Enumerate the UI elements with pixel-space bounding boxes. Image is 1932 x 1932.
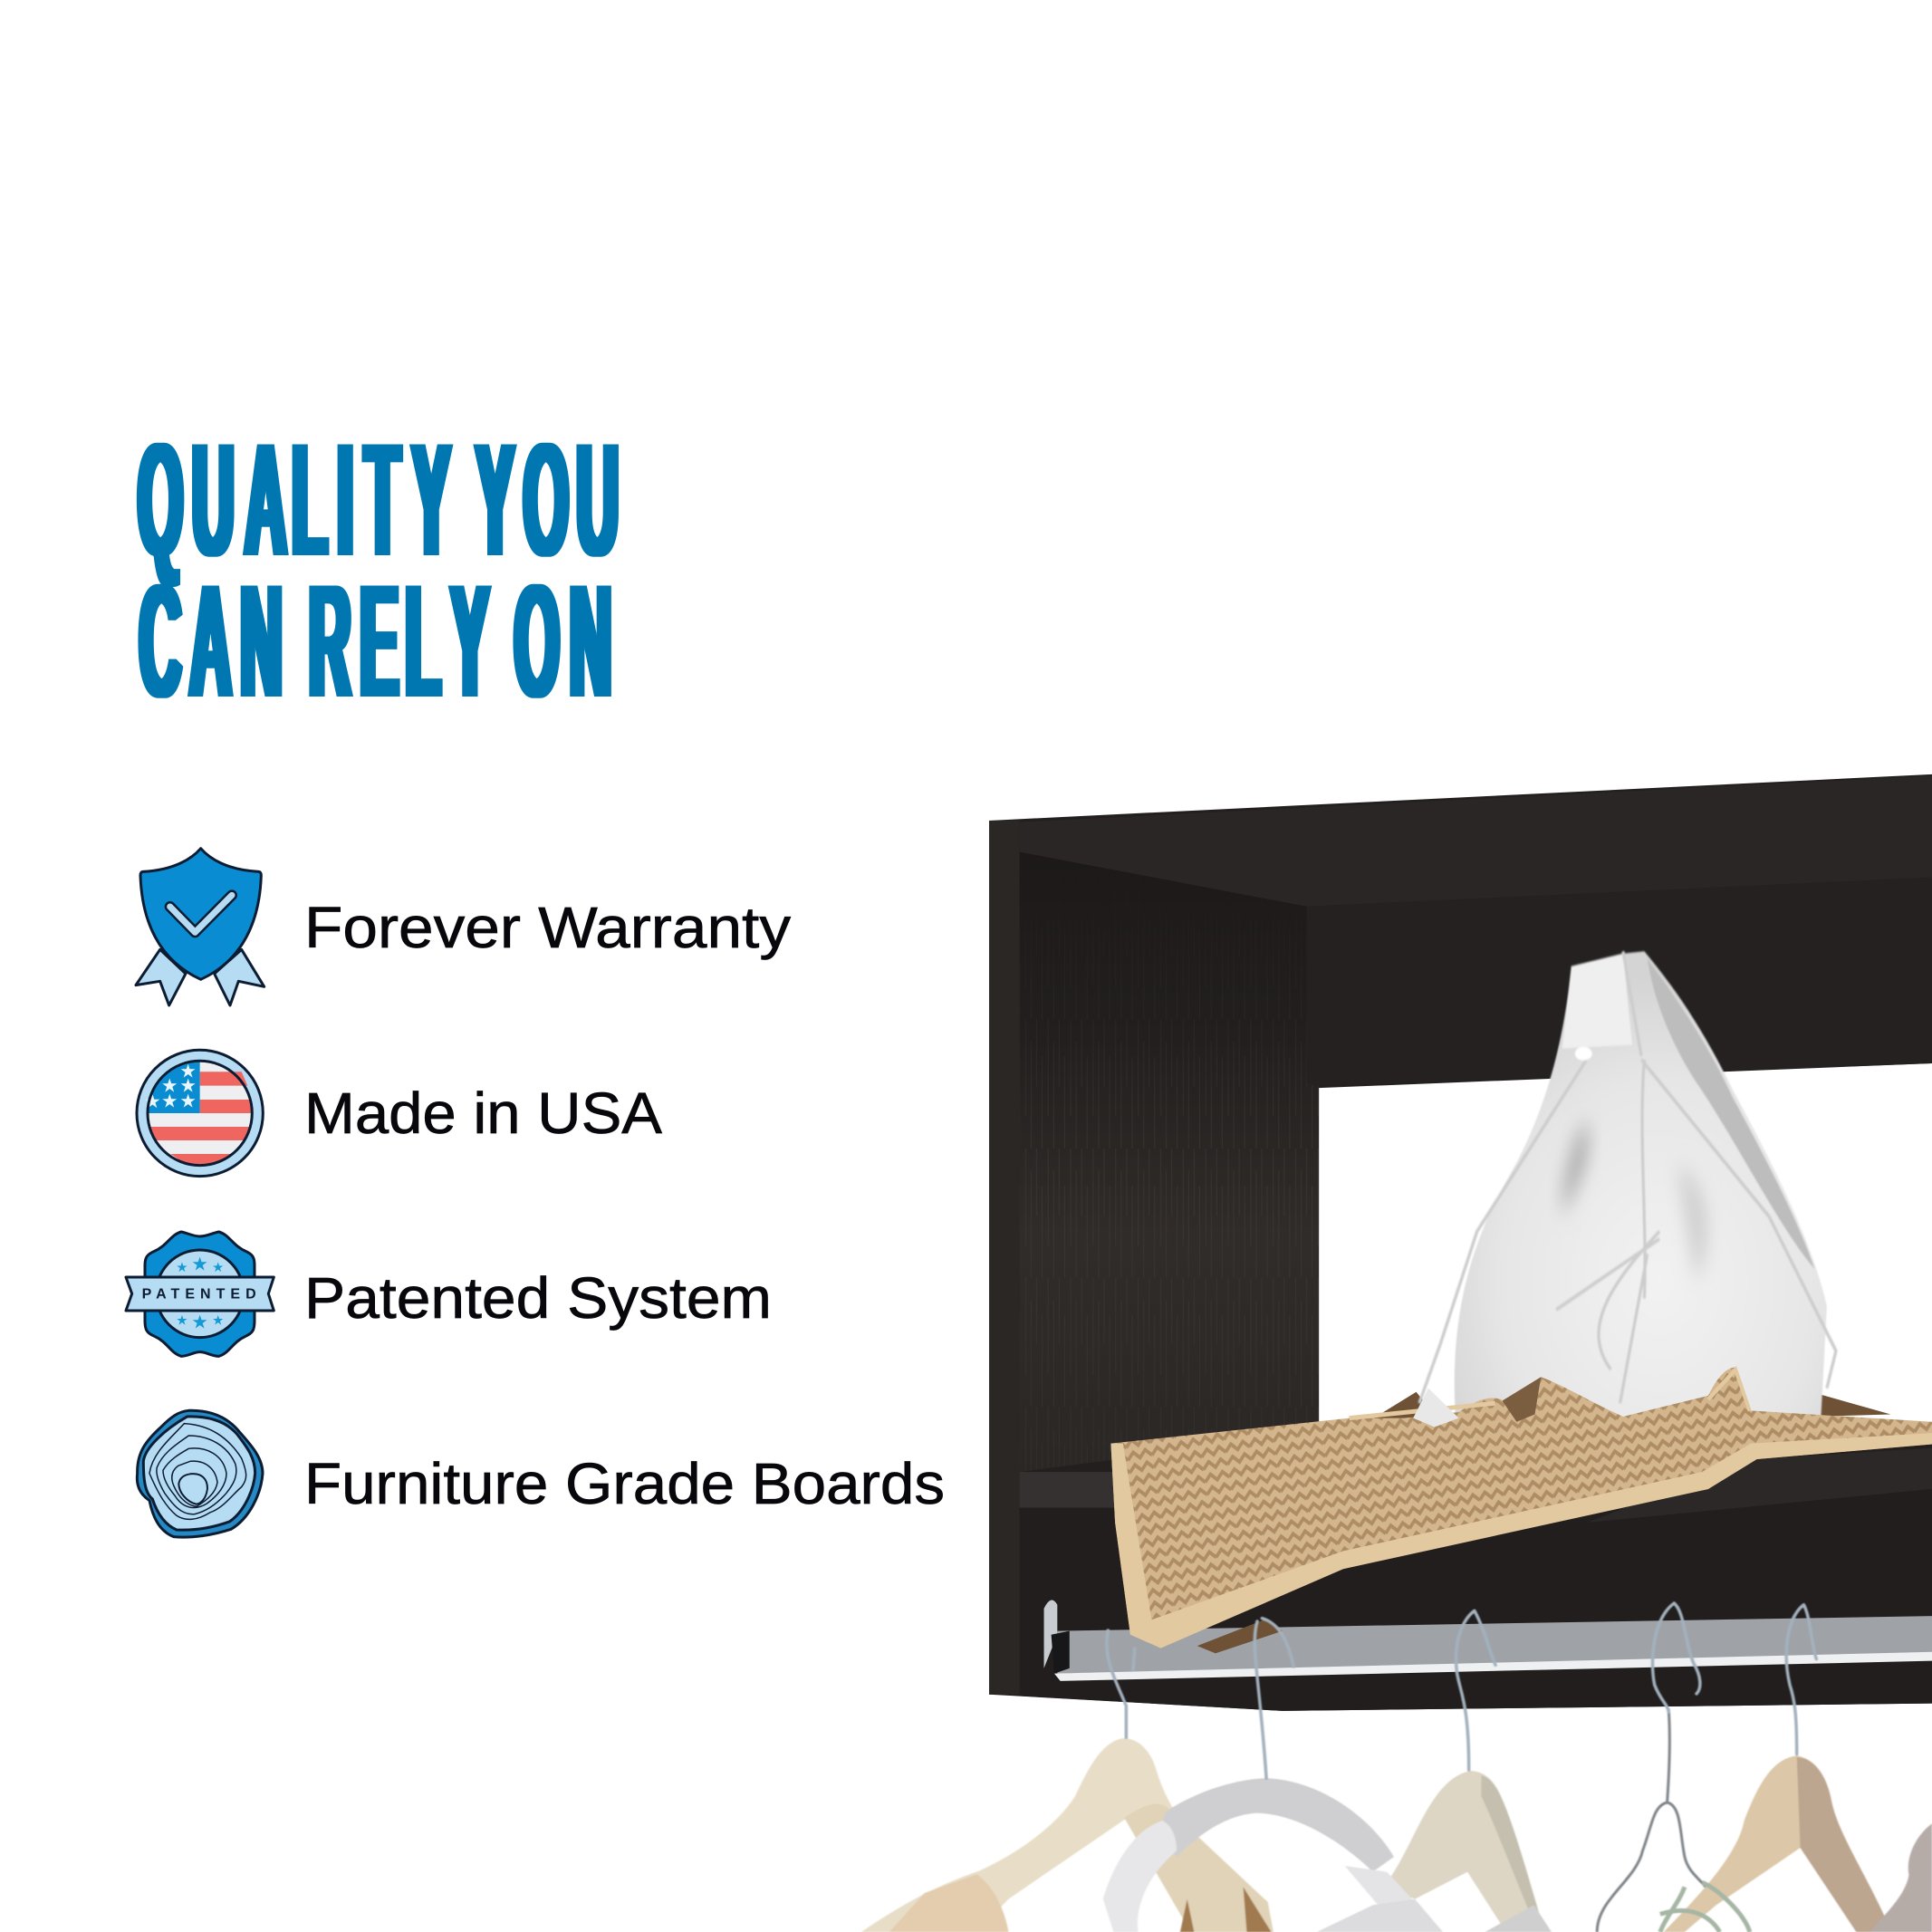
- feature: patented system: [126, 1232, 772, 1356]
- icon: patented seal: ★: [212, 1260, 224, 1275]
- feature: furniture grade boards: [137, 1410, 945, 1537]
- icon: usa flag badge: ★: [179, 1061, 197, 1082]
- icon: patented seal: PATENTED: [142, 1287, 256, 1302]
- feature: forever warranty: [136, 849, 791, 1005]
- icon: patented seal: ★: [176, 1260, 188, 1275]
- hanger 4 wire: [1597, 1709, 1706, 1932]
- opening behind shelf: [1319, 1063, 1932, 1437]
- left front edge: [989, 821, 1020, 1695]
- feature list: [126, 849, 945, 1537]
- icon: patented seal: ★: [176, 1313, 188, 1329]
- icon: patented seal: [126, 1232, 274, 1356]
- shelf edge left: [1020, 1472, 1123, 1508]
- label: patented system: Patented System: [304, 1265, 772, 1331]
- icon: usa flag badge: ★: [179, 1090, 197, 1111]
- closet rod: [1044, 1600, 1932, 1681]
- icon: wood rings: [137, 1410, 263, 1537]
- top panel underside: [1020, 775, 1932, 907]
- icon: warranty shield: [136, 849, 264, 1005]
- icon: patented seal: ★: [212, 1313, 224, 1329]
- back rail: [1307, 878, 1932, 1087]
- icon: usa flag badge: ★: [161, 1090, 178, 1111]
- shelf surface right: [1587, 1448, 1932, 1523]
- inner left side panel: [1020, 852, 1319, 1472]
- icon: usa flag badge: ★: [161, 1075, 178, 1097]
- garment: [1870, 1823, 1932, 1932]
- label: furniture grade boards: Furniture Grade Boards: [304, 1451, 945, 1516]
- hangers: [861, 1603, 1932, 1932]
- feature: made in usa: [137, 1050, 662, 1177]
- label: made in usa: Made in USA: [304, 1081, 662, 1146]
- folded knit blanket: [1110, 951, 1932, 1653]
- icon: usa flag badge: ★: [144, 1091, 161, 1112]
- cabinet body: [989, 774, 1932, 1711]
- icon: patented seal: ★: [191, 1254, 208, 1275]
- hanger 1: [861, 1738, 1274, 1932]
- drawstring bag: [1419, 951, 1836, 1422]
- hanger 5: [1660, 1755, 1891, 1932]
- title: CAN RELY ON: [139, 552, 611, 732]
- label: forever warranty: Forever Warranty: [304, 895, 791, 960]
- hanger 2: [1103, 1778, 1552, 1932]
- metal hooks: [1107, 1603, 1816, 1778]
- icon: usa flag badge: [137, 1050, 263, 1177]
- closet photo: [861, 774, 1932, 1932]
- cabinet: [989, 774, 1932, 1711]
- title: [138, 410, 619, 732]
- infographic canvas: [125, 442, 1932, 1932]
- icon: patented seal: ★: [191, 1312, 208, 1333]
- title: QUALITY YOU: [138, 410, 619, 591]
- hanger 3: [1383, 1771, 1544, 1932]
- icon: usa flag badge: ★: [179, 1075, 197, 1097]
